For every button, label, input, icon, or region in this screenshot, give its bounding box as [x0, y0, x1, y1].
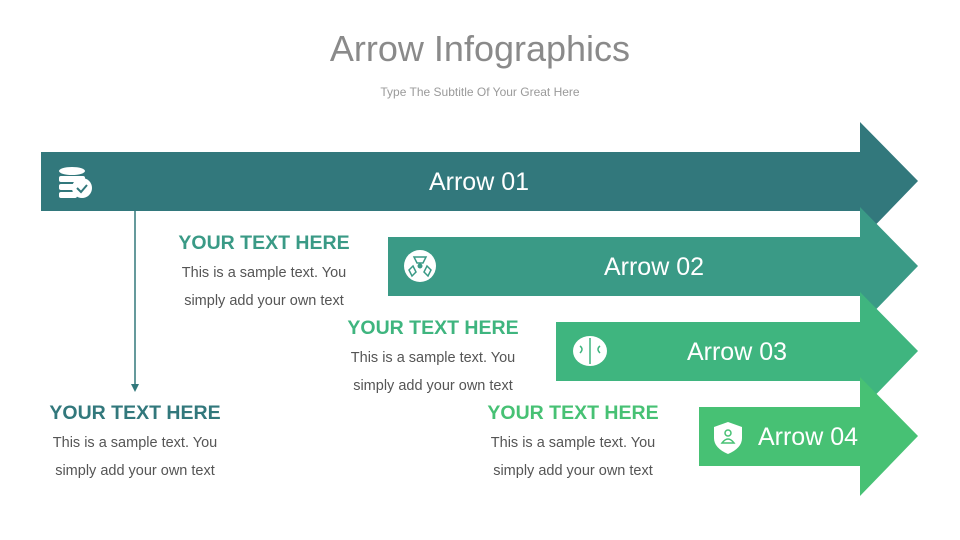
- arrow 03: Arrow 03: [687, 338, 787, 366]
- text block 2: This is a sample text. You: [182, 265, 346, 281]
- text block 2: YOUR TEXT HERE: [178, 232, 350, 254]
- text block 3: This is a sample text. You: [351, 350, 515, 366]
- text block 1: YOUR TEXT HERE: [49, 402, 221, 424]
- text block 1: This is a sample text. You: [53, 435, 217, 451]
- arrow 03: [556, 292, 918, 411]
- text block 4: YOUR TEXT HERE: [487, 402, 659, 424]
- subtitle: Type The Subtitle Of Your Great Here: [380, 85, 580, 99]
- connector line with arrowhead: [131, 211, 139, 392]
- arrow 04: [699, 377, 918, 496]
- text block 3: [347, 317, 519, 394]
- text block 3: simply add your own text: [353, 378, 513, 394]
- arrow 04: Arrow 04: [758, 423, 858, 451]
- icon: brain: [573, 336, 607, 366]
- text block 1: [49, 402, 221, 478]
- text block 1: simply add your own text: [55, 462, 215, 478]
- text block 4: [487, 402, 659, 478]
- icon: database check: [59, 167, 92, 198]
- text block 4: This is a sample text. You: [491, 435, 655, 451]
- arrow 02: [388, 207, 918, 326]
- arrow 02: Arrow 02: [604, 253, 704, 281]
- text block 4: simply add your own text: [493, 462, 653, 478]
- text block 2: [178, 232, 350, 308]
- text block 2: simply add your own text: [184, 292, 344, 308]
- icon: radiation: [404, 250, 436, 282]
- title: Arrow Infographics: [330, 28, 630, 69]
- arrow 01: Arrow 01: [429, 168, 529, 196]
- icon: shield user: [714, 422, 742, 454]
- text block 3: YOUR TEXT HERE: [347, 317, 519, 339]
- arrow 01: [41, 122, 918, 241]
